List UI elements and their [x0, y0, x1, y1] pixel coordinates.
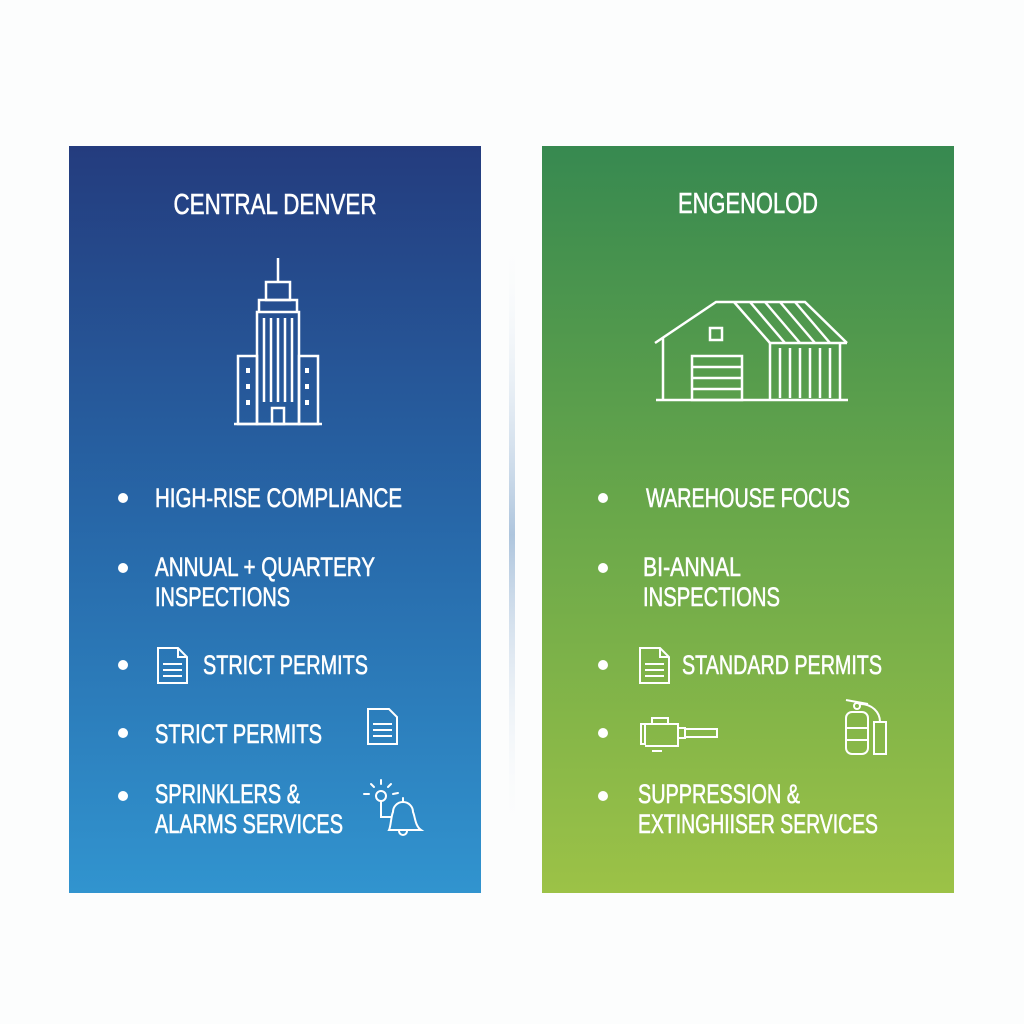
list: denver items: STRICT PERMITS [155, 719, 322, 749]
list: denver items: SPRINKLERS & [155, 779, 300, 809]
list: engenolod items: WAREHOUSE FOCUS [646, 483, 850, 513]
list: engenolod items: STANDARD PERMITS [682, 650, 882, 680]
panel: engenolod [542, 146, 954, 893]
list: denver items [118, 483, 421, 839]
list: denver items: STRICT PERMITS [203, 650, 368, 680]
list: engenolod items: INSPECTIONS [643, 582, 780, 612]
panel: central denver [69, 146, 481, 893]
list: engenolod items: SUPPRESSION & [638, 779, 800, 809]
list: engenolod items: EXTINGHIISER SERVICES [638, 809, 878, 839]
list: denver items: ALARMS SERVICES [155, 809, 343, 839]
list: denver items: ANNUAL + QUARTERY [155, 552, 375, 582]
list: engenolod items: BI-ANNAL [643, 552, 741, 582]
heading: engenolod: ENGENOLOD [678, 188, 818, 220]
list: denver items: HIGH-RISE COMPLIANCE [155, 483, 402, 513]
icon: skyscraper [234, 258, 322, 424]
heading: central denver: CENTRAL DENVER [174, 189, 376, 221]
icon: warehouse [655, 302, 848, 400]
list: engenolod items [598, 483, 886, 839]
list: denver items: INSPECTIONS [155, 582, 290, 612]
